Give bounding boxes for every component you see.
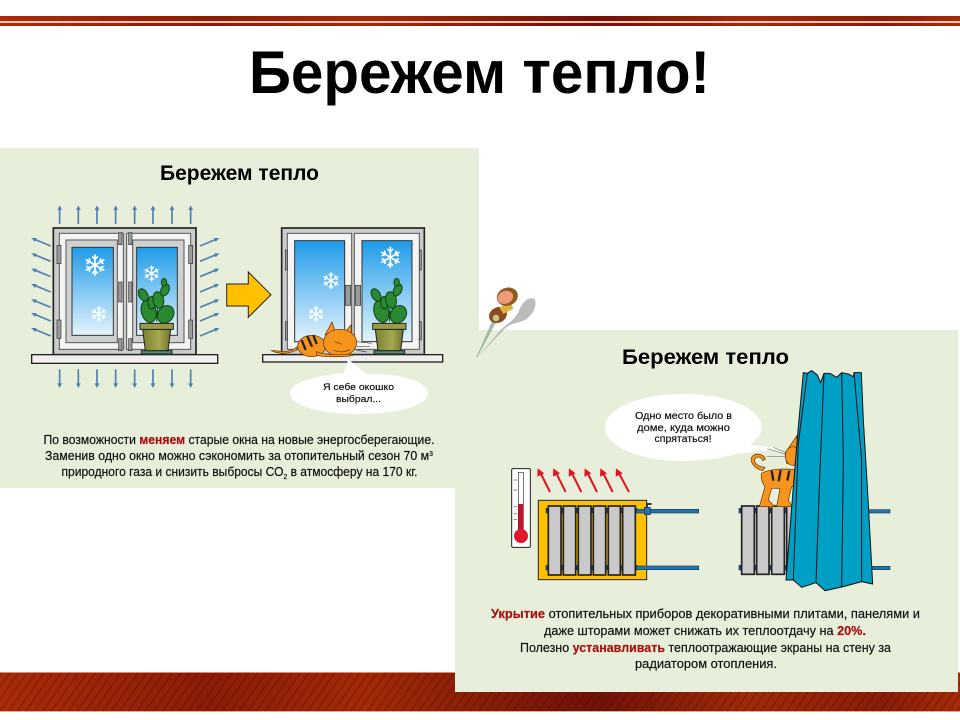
callout text: window cat: Я себе окошко — [323, 382, 394, 393]
panel: replacing windows — [0, 148, 479, 488]
icon: radiator with reflective screen — [538, 500, 699, 580]
text block: window advice: По возможности меняем старые окна на новые энергосберегающие. — [44, 433, 434, 447]
icon: covered radiator — [739, 506, 890, 574]
bottom decorative band — [0, 672, 960, 712]
callout text: curtain cat: Одно место было в — [635, 410, 732, 422]
callout text: window cat — [323, 382, 394, 405]
icon: push pin — [477, 285, 535, 357]
illustration: new window with cat — [263, 228, 443, 414]
text block: radiator advice — [491, 607, 920, 671]
text block: window advice: природного газа и снизить выбросы СО — [62, 465, 292, 479]
main title: Бережем тепло! — [249, 39, 710, 106]
callout text: curtain cat: спрятаться! — [654, 434, 712, 445]
icon: thermometer — [512, 469, 530, 547]
callout: cat speech bubble — [290, 359, 428, 414]
illustration: radiators — [512, 371, 890, 591]
callout: curtain cat bubble — [605, 394, 783, 461]
text block: window advice: в атмосферу на 170 кг. — [287, 465, 418, 479]
icon: cat on radiator — [751, 436, 800, 507]
text block: window advice: 3 — [429, 451, 433, 458]
panel heading: windows: Бережем тепло — [160, 162, 319, 185]
icon: curtain — [786, 371, 873, 591]
callout text: curtain cat: доме, куда можно — [637, 423, 730, 434]
callout text: window cat: выбрал... — [336, 394, 381, 405]
text block: window advice: 2 — [283, 474, 287, 481]
text block: radiator advice: Укрытие отопительных приборов декоративными плитами, панелями и — [491, 607, 920, 621]
icon: sleeping cat — [271, 322, 372, 357]
panel: radiators — [455, 330, 958, 692]
top decorative band — [0, 16, 960, 26]
text block: radiator advice: даже шторами может снижать их теплоотдачу на 20%. — [544, 624, 866, 638]
callout text: curtain cat — [635, 410, 732, 445]
text block: radiator advice: радиатором отопления. — [635, 657, 777, 671]
text block: window advice — [44, 433, 434, 481]
panel heading: radiators: Бережем тепло — [622, 346, 789, 369]
text block: radiator advice: Полезно устанавливать теплоотражающие экраны на стену за — [520, 641, 891, 655]
illustration: old window with heat loss — [31, 205, 219, 388]
arrow: replace window — [227, 272, 271, 317]
arrows: heat rising — [537, 468, 629, 492]
text block: window advice: Заменив одно окно можно сэкономить за отопительный сезон 70 м — [45, 449, 435, 463]
